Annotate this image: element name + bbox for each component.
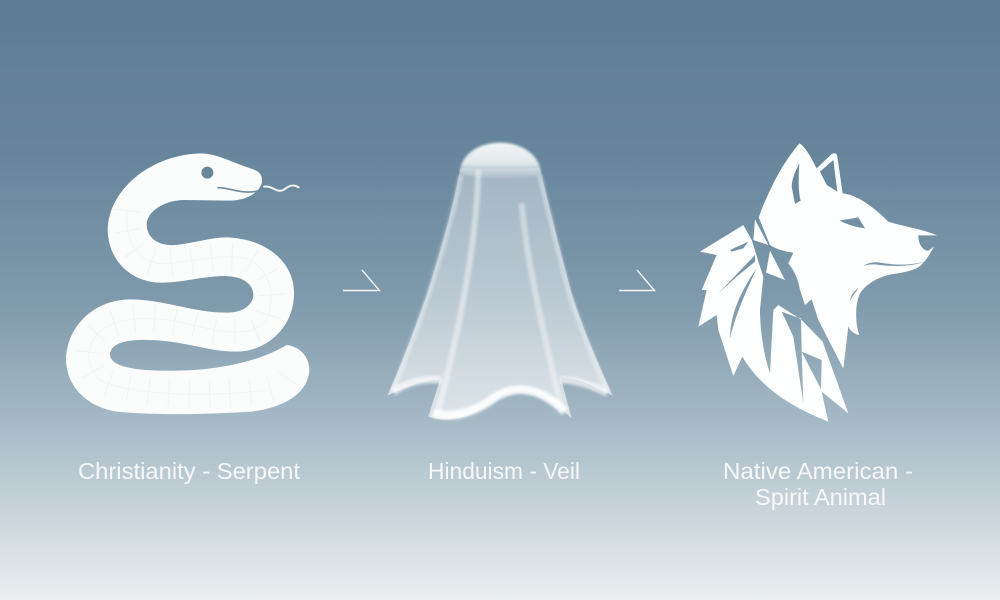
label: Native American - Spirit Animal: Native American - xyxy=(723,458,913,484)
label: Native American - Spirit Animal xyxy=(723,458,913,510)
label: Christianity - Serpent: Christianity - Serpent xyxy=(78,458,300,484)
icon: serpent xyxy=(66,153,309,414)
label: Native American - Spirit Animal: Spirit Animal xyxy=(755,484,886,510)
icon: veil xyxy=(387,143,613,419)
icon: wolf head with feathers xyxy=(698,143,937,422)
arrow: serpent to veil xyxy=(343,270,380,290)
arrow: veil to wolf xyxy=(619,270,654,290)
label: Hinduism - Veil: Hinduism - Veil xyxy=(428,458,580,484)
